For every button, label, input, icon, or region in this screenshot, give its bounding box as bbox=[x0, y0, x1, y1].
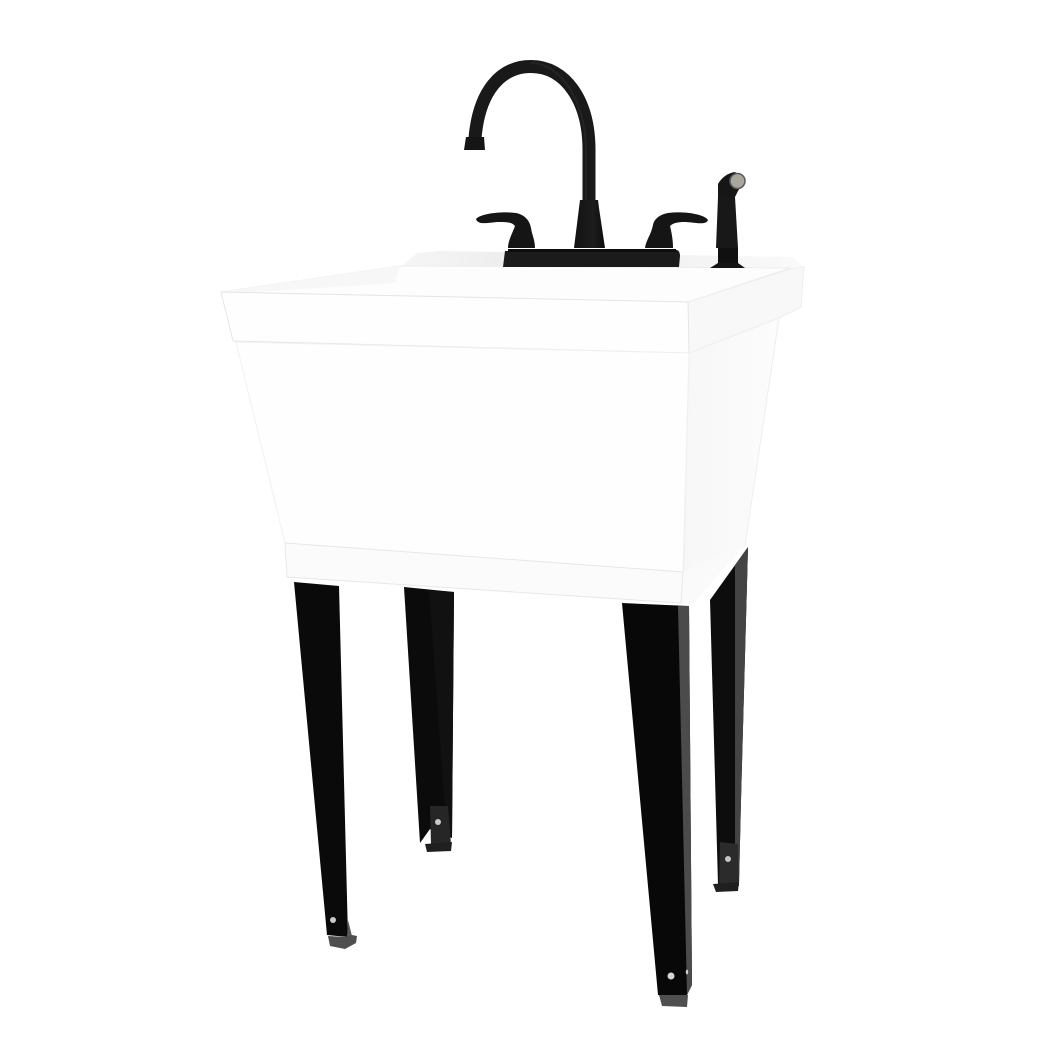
faucet handle right bbox=[645, 212, 708, 248]
side sprayer bbox=[710, 172, 745, 268]
leg: front right bbox=[622, 603, 692, 1007]
faucet handle left bbox=[476, 212, 535, 248]
tub interior / rim top bbox=[221, 266, 790, 302]
right rim bbox=[688, 267, 804, 353]
sink tub bbox=[221, 251, 804, 604]
bottom band bbox=[285, 543, 745, 604]
back ledge bbox=[400, 251, 804, 272]
right side of basin bbox=[683, 318, 779, 603]
leg: front left bbox=[294, 582, 357, 949]
leg: back left bbox=[404, 587, 454, 852]
front rim bbox=[221, 292, 689, 353]
faucet spout bbox=[464, 63, 605, 248]
front face of basin bbox=[236, 342, 689, 572]
faucet deck plate bbox=[503, 249, 680, 267]
leg: back right bbox=[710, 547, 748, 892]
